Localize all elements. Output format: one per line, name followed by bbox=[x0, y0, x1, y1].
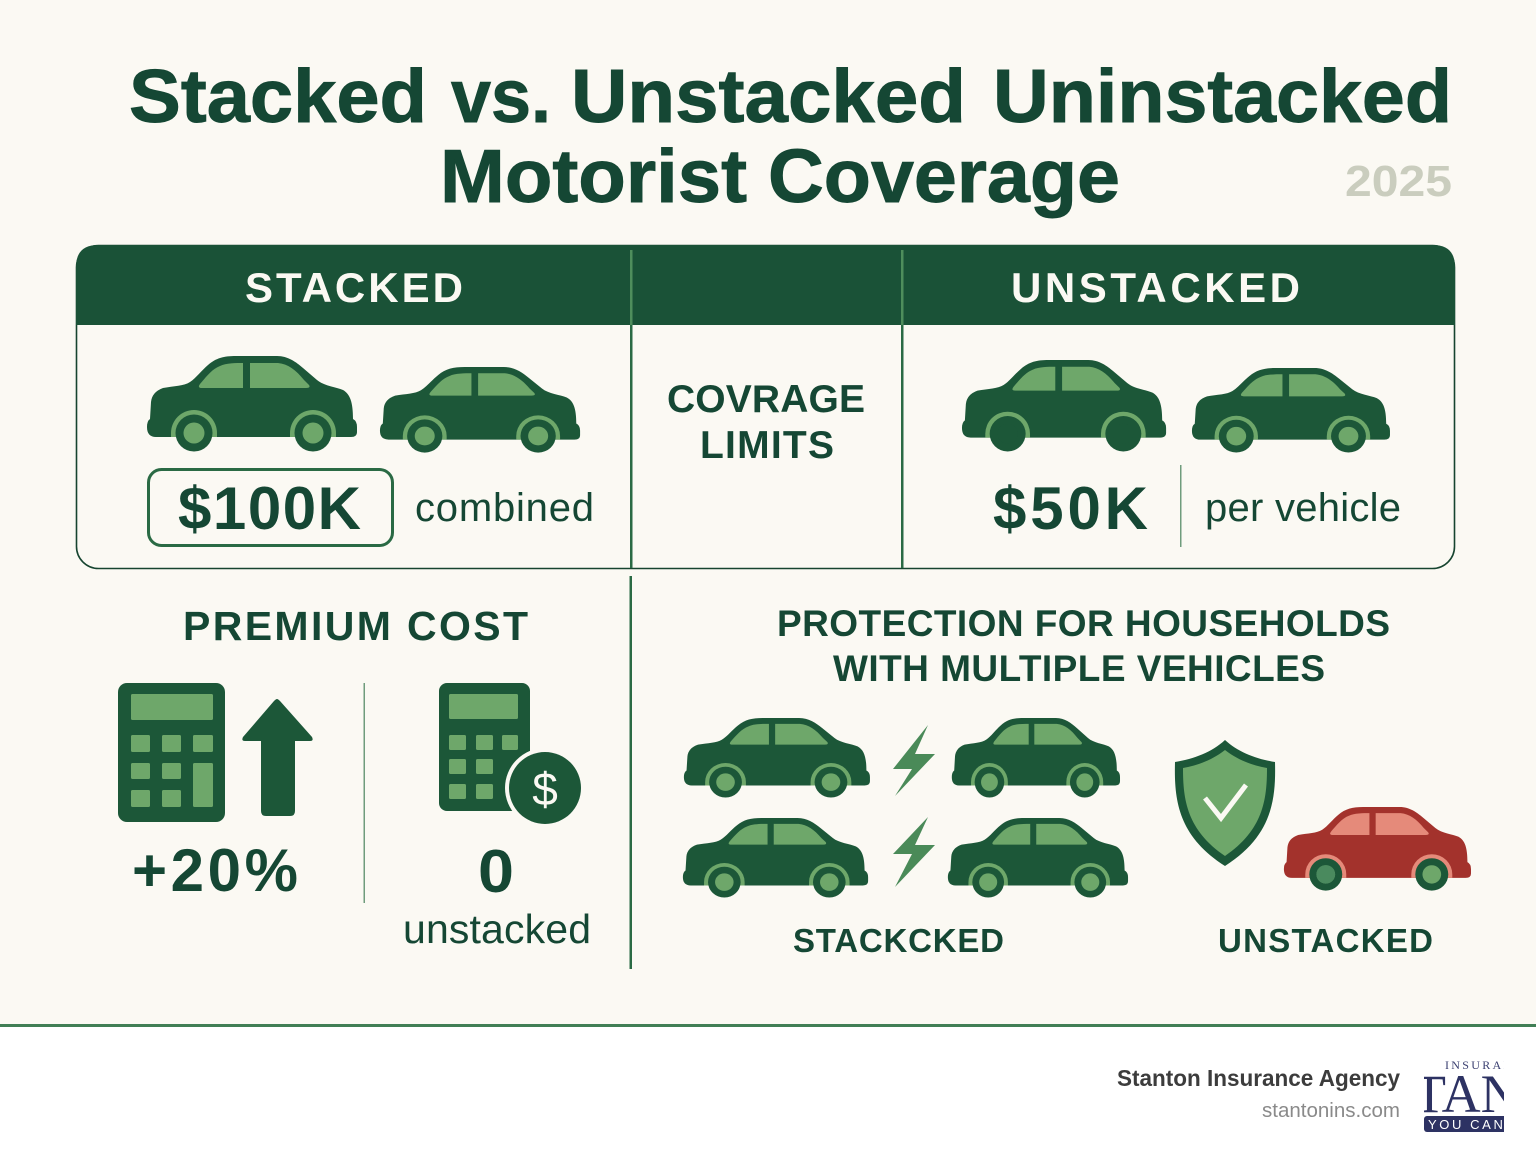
title bbox=[129, 54, 1452, 218]
heading: protection for households: WITH MULTIPLE VEHICLES bbox=[833, 648, 1325, 689]
icon: unstacked car 1 bbox=[962, 360, 1166, 451]
table header band bbox=[76, 245, 1455, 325]
footer: agency name: stantonins.com bbox=[1262, 1100, 1400, 1122]
label: coverage limits: LIMITS bbox=[700, 424, 834, 467]
heading: unstacked: UNSTACKED bbox=[1011, 264, 1300, 311]
label: unstacked: UNSTACKED bbox=[1218, 922, 1433, 959]
icon: car top left bbox=[684, 718, 870, 798]
callout: $100K combined bbox=[148, 470, 594, 546]
icon: up arrow bbox=[242, 699, 313, 816]
label: coverage limits: COVRAGE bbox=[667, 378, 865, 421]
title: vs. bbox=[451, 54, 551, 138]
year label: 2025 bbox=[1345, 157, 1452, 206]
icon: calculator with dollar coin: $ bbox=[532, 763, 558, 815]
title: Coverage bbox=[768, 134, 1120, 218]
stat: 0 unstacked: 0 bbox=[478, 838, 514, 905]
footer: agency name: Stanton Insurance Agency bbox=[1117, 1065, 1400, 1091]
panel: protection for households bbox=[683, 603, 1471, 959]
icon: car top right bbox=[952, 718, 1120, 798]
callout: $50K per vehicle: per vehicle bbox=[1205, 486, 1401, 530]
title: Unstacked bbox=[571, 54, 966, 138]
label: coverage limits bbox=[667, 378, 865, 467]
icon: unstacked car 2 bbox=[1192, 368, 1390, 453]
icon: calculator with dollar coin bbox=[439, 683, 585, 828]
panel: premium cost bbox=[118, 603, 591, 952]
title: Stacked bbox=[129, 54, 427, 138]
stat: 0 unstacked bbox=[403, 838, 591, 952]
footer bbox=[0, 1024, 1536, 1154]
footer: agency logo: YOU CAN bbox=[1428, 1117, 1505, 1132]
icon: calculator large bbox=[118, 683, 225, 822]
stat: +20%: +20% bbox=[132, 837, 298, 904]
icon: shield with check bbox=[1175, 740, 1275, 866]
heading: premium cost: PREMIUM COST bbox=[183, 603, 528, 649]
heading: protection for households bbox=[777, 603, 1390, 689]
title: Uninstacked bbox=[993, 54, 1452, 138]
footer: agency logo: INSURANCE bbox=[1445, 1058, 1534, 1072]
section divider bbox=[630, 576, 632, 969]
label: stackcked: STACKCKED bbox=[793, 922, 1004, 959]
icon: car bottom right bbox=[948, 818, 1128, 898]
icon: lightning bolt bottom bbox=[893, 817, 935, 887]
callout: $100K combined: combined bbox=[415, 486, 594, 530]
icon: lightning bolt top bbox=[893, 725, 935, 796]
stat: 0 unstacked: unstacked bbox=[403, 906, 591, 952]
icon: stacked car 1 bbox=[147, 356, 357, 452]
heading: protection for households: PROTECTION FOR HOUSEHOLDS bbox=[777, 603, 1390, 644]
footer: agency logo bbox=[1424, 1062, 1504, 1132]
title: Motorist bbox=[440, 134, 747, 218]
panel: coverage limits comparison table bbox=[76, 245, 1455, 568]
icon: car bottom left bbox=[683, 818, 868, 898]
icon: stacked car 2 bbox=[380, 367, 580, 453]
callout: $50K per vehicle bbox=[993, 465, 1401, 547]
icon: red car bbox=[1284, 807, 1471, 891]
heading: stacked: STACKED bbox=[245, 264, 463, 311]
callout: $100K combined: $100K bbox=[178, 475, 361, 542]
footer: agency logo: TAN bbox=[1413, 1064, 1520, 1124]
footer: agency name bbox=[1117, 1065, 1400, 1122]
callout: $50K per vehicle: $50K bbox=[993, 475, 1148, 542]
